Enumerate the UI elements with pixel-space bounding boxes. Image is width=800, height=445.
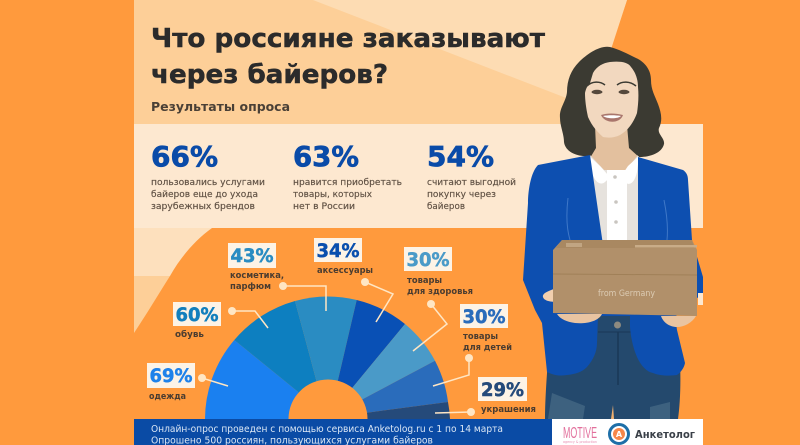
jacket highlights — [567, 198, 667, 240]
label: clothing 69%: 69% — [150, 366, 192, 387]
slice: clothing 69% — [205, 340, 328, 419]
stat: 63%: товары, которых — [293, 190, 372, 200]
stat: 63%: нет в России — [293, 202, 355, 212]
title — [151, 24, 545, 90]
box caption: from Germany — [598, 289, 656, 299]
jacket — [523, 155, 703, 376]
stat: 54% — [427, 140, 516, 212]
label: cosmetics 43%: 43% — [230, 246, 274, 267]
neck — [590, 125, 640, 186]
label: shoes 60%: 60% — [176, 305, 218, 326]
slice: kids goods 30% — [328, 361, 448, 419]
left thumb — [543, 288, 558, 302]
stat: 54%: 54% — [427, 140, 494, 173]
cuff — [698, 293, 703, 305]
label: accessories 34%: 34% — [316, 241, 360, 262]
footer: survey note — [134, 419, 552, 445]
illustration: woman holding a box — [523, 47, 703, 419]
logo: Motive: agency & production — [563, 440, 597, 444]
label: accessories 34%: аксессуары — [317, 265, 373, 275]
cardboard box — [553, 240, 697, 316]
chart: semicircle of product categories — [205, 297, 450, 445]
panel: key statistics — [134, 124, 703, 228]
stat: 54%: считают выгодной — [427, 178, 516, 188]
footer: logos — [552, 419, 703, 445]
shirt buttons — [613, 175, 618, 224]
label: health goods 30%: для здоровья — [407, 286, 473, 296]
logo: Anketolog icon: А — [616, 430, 623, 439]
slice: cosmetics 43% — [295, 297, 357, 419]
shirt centre — [607, 170, 627, 245]
logo: Anketolog wordmark: Анкетолог — [635, 428, 695, 441]
panel: light corner wedge — [134, 228, 212, 333]
label: health goods 30%: 30% — [406, 250, 450, 271]
facial features — [587, 82, 636, 122]
chart centre hole — [288, 380, 368, 445]
shirt — [590, 155, 638, 245]
collar — [589, 156, 639, 184]
label: cosmetics 43%: парфюм — [230, 281, 271, 291]
stat: 63%: нравится приобретать — [293, 178, 402, 188]
subtitle: Результаты опроса — [151, 99, 290, 114]
label: jewellery 29%: украшения — [481, 404, 536, 414]
slice: accessories 34% — [328, 300, 405, 419]
label: cosmetics 43%: косметика, — [230, 270, 284, 280]
label: clothing 69% — [147, 363, 228, 401]
stat: 66%: пользовались услугами — [151, 178, 265, 188]
stat: 66%: байеров еще до ухода — [151, 190, 258, 200]
label: kids goods 30%: 30% — [462, 307, 506, 328]
logo: Anketolog icon — [610, 424, 628, 444]
label: cosmetics 43% — [228, 243, 326, 311]
stat: 54%: покупку через — [427, 190, 496, 200]
jeans details — [548, 322, 670, 419]
label: health goods 30%: товары — [407, 275, 442, 285]
title: Что россияне заказывают — [151, 24, 545, 54]
label: shoes 60%: обувь — [175, 329, 204, 339]
jeans — [545, 316, 680, 419]
slice: health goods 30% — [328, 324, 435, 419]
hair — [560, 47, 664, 157]
label: kids goods 30%: товары — [463, 331, 498, 341]
label: accessories 34% — [314, 238, 393, 322]
title: через байеров? — [151, 60, 388, 90]
stat: 63% — [293, 140, 402, 212]
stat: 66%: зарубежных брендов — [151, 202, 255, 212]
label: kids goods 30% — [433, 304, 512, 386]
stat: 66% — [151, 140, 265, 212]
stat: 63%: 63% — [293, 140, 359, 173]
label: clothing 69%: одежда — [149, 391, 186, 401]
face — [585, 62, 638, 138]
label: shoes 60% — [173, 302, 268, 339]
stat: 54%: байеров — [427, 202, 465, 212]
label: health goods 30% — [404, 247, 473, 351]
logo: Motive: MOTIVE — [563, 425, 597, 442]
hands under box — [557, 314, 696, 327]
logo: Motive — [563, 425, 597, 444]
slice: jewellery 29% — [328, 402, 450, 419]
panel: header background — [134, 0, 627, 124]
slice: shoes 60% — [234, 301, 328, 419]
stat: 66%: 66% — [151, 140, 218, 173]
footer: survey note: Онлайн-опрос проведен с помощью сервиса Anketolog.ru с 1 по 14 марта — [151, 424, 503, 435]
label: jewellery 29% — [435, 377, 536, 416]
label: kids goods 30%: для детей — [463, 342, 512, 352]
label: jewellery 29%: 29% — [481, 380, 524, 401]
